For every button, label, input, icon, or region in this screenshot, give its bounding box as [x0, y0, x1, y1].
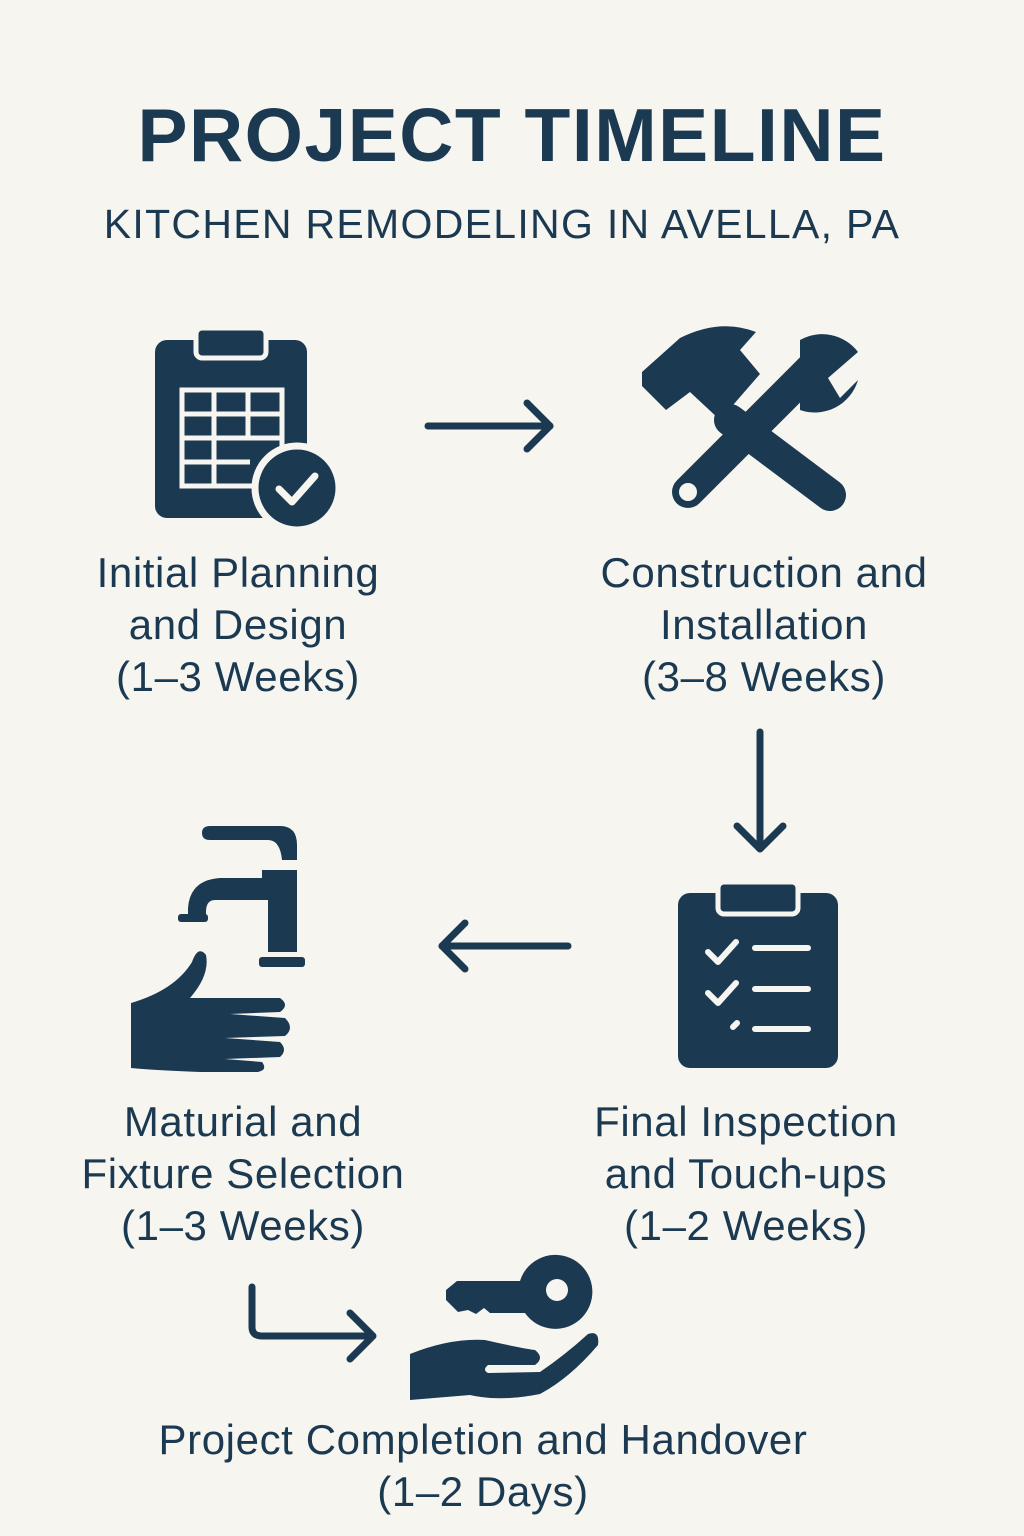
- icon: planning clipboard: [155, 328, 339, 530]
- label: inspection: Final Inspection: [594, 1098, 898, 1145]
- label: construction: Construction and: [600, 549, 928, 596]
- arrow: left: [442, 923, 568, 969]
- label: inspection: (1–2 Weeks): [624, 1202, 868, 1249]
- label: inspection: and Touch-ups: [605, 1150, 887, 1197]
- icon: hammer and wrench: [642, 326, 858, 501]
- arrow: right: [428, 403, 550, 449]
- label: planning: and Design: [129, 601, 347, 648]
- label: material: Maturial and: [124, 1098, 362, 1145]
- label: completion: (1–2 Days): [377, 1468, 589, 1515]
- icon: key in hand: [410, 1255, 598, 1400]
- label: material: (1–3 Weeks): [121, 1202, 365, 1249]
- label: material: [81, 1098, 404, 1249]
- label: planning: Initial Planning: [97, 549, 379, 596]
- label: completion: [159, 1416, 807, 1515]
- subtitle: KITCHEN REMODELING IN AVELLA, PA: [104, 201, 900, 247]
- label: completion: Project Completion and Handover: [159, 1416, 807, 1463]
- arrow: down: [737, 732, 783, 849]
- label: construction: (3–8 Weeks): [642, 653, 886, 700]
- label: construction: Installation: [660, 601, 868, 648]
- label: construction: [600, 549, 928, 700]
- icon: faucet and hand: [131, 826, 305, 1072]
- icon: inspection checklist: [678, 882, 838, 1068]
- label: planning: [97, 549, 379, 700]
- arrow: bend right: [252, 1287, 373, 1359]
- title: PROJECT TIMELINE: [137, 93, 887, 177]
- label: material: Fixture Selection: [81, 1150, 404, 1197]
- label: inspection: [594, 1098, 898, 1249]
- label: planning: (1–3 Weeks): [116, 653, 360, 700]
